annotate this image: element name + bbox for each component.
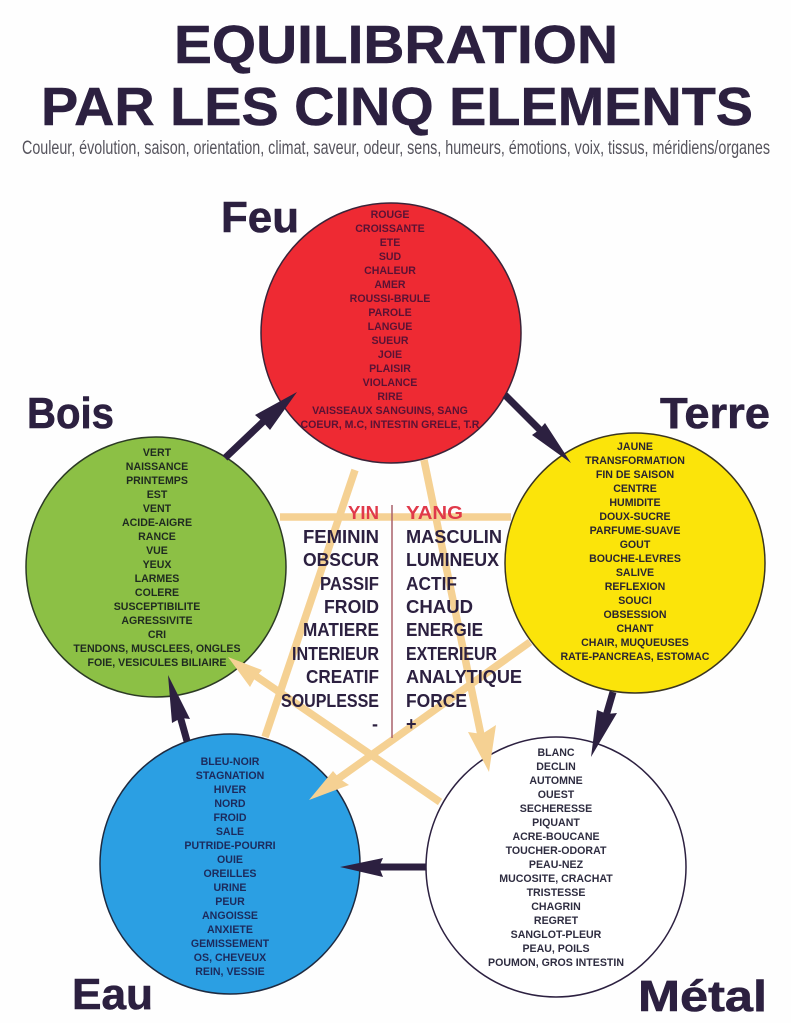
metal list: PEAU-NEZ xyxy=(529,859,584,871)
eau list: FROID xyxy=(214,812,247,824)
bois list: VUE xyxy=(146,545,168,557)
label: terre: Terre xyxy=(660,389,770,438)
yin column: MATIERE xyxy=(303,620,379,640)
terre list: RATE-PANCREAS, ESTOMAC xyxy=(561,651,710,663)
metal list: TOUCHER-ODORAT xyxy=(506,845,607,857)
feu list: RIRE xyxy=(377,391,403,403)
feu list: COEUR, M.C, INTESTIN GRELE, T.R xyxy=(301,419,480,431)
yin column xyxy=(281,503,379,734)
terre list: SOUCI xyxy=(618,595,652,607)
yin column: OBSCUR xyxy=(303,550,379,570)
yin column: PASSIF xyxy=(320,574,379,594)
feu list: LANGUE xyxy=(368,321,412,333)
title: PAR LES CINQ ELEMENTS xyxy=(41,77,753,137)
panel: bois xyxy=(26,437,286,697)
eau list: STAGNATION xyxy=(196,770,264,782)
eau list: BLEU-NOIR xyxy=(201,756,260,768)
eau list: PUTRIDE-POURRI xyxy=(184,840,276,852)
metal list: REGRET xyxy=(534,915,579,927)
terre list: BOUCHE-LEVRES xyxy=(589,553,681,565)
title: EQUILIBRATION xyxy=(174,15,618,75)
metal list: SECHERESSE xyxy=(520,803,592,815)
terre list: CENTRE xyxy=(613,483,657,495)
yin column: INTERIEUR xyxy=(292,644,379,664)
yang column: EXTERIEUR xyxy=(406,644,497,664)
panel: yin yang table xyxy=(281,503,522,738)
feu list: ETE xyxy=(380,237,400,249)
label: metal: Métal xyxy=(638,972,767,1021)
title xyxy=(41,15,753,137)
eau list: OREILLES xyxy=(204,868,256,880)
metal list: DECLIN xyxy=(536,761,576,773)
yang column: + xyxy=(406,714,417,734)
arrow: feu to terre xyxy=(505,395,571,463)
yang column: ENERGIE xyxy=(406,620,483,640)
terre list: SALIVE xyxy=(616,567,654,579)
metal list: CHAGRIN xyxy=(531,901,581,913)
feu list: SUD xyxy=(379,251,402,263)
yin column: CREATIF xyxy=(306,667,379,687)
bois list: VENT xyxy=(143,503,172,515)
yang column: ANALYTIQUE xyxy=(406,667,522,687)
bois list: SUSCEPTIBILITE xyxy=(114,601,200,613)
terre list: TRANSFORMATION xyxy=(585,455,685,467)
feu list: CROISSANTE xyxy=(355,223,425,235)
eau list: HIVER xyxy=(214,784,247,796)
label: bois: Bois xyxy=(27,389,114,438)
yin column: FEMININ xyxy=(303,527,379,547)
bois list: ACIDE-AIGRE xyxy=(122,517,192,529)
eau list: ANXIETE xyxy=(207,924,253,936)
panel: feu xyxy=(261,203,521,463)
eau list: GEMISSEMENT xyxy=(191,938,270,950)
bois list: PRINTEMPS xyxy=(126,475,188,487)
metal list: PIQUANT xyxy=(532,817,580,829)
bois list: EST xyxy=(147,489,168,501)
label: feu: Feu xyxy=(221,193,299,242)
yin column: FROID xyxy=(324,597,379,617)
feu list: PAROLE xyxy=(368,307,412,319)
bois list: AGRESSIVITE xyxy=(121,615,193,627)
feu list: PLAISIR xyxy=(369,363,411,375)
yang column: FORCE xyxy=(406,691,467,711)
terre list: JAUNE xyxy=(617,441,653,453)
metal list: SANGLOT-PLEUR xyxy=(511,929,602,941)
yang column: CHAUD xyxy=(406,597,473,617)
terre list: PARFUME-SUAVE xyxy=(590,525,680,537)
bois list: RANCE xyxy=(138,531,176,543)
arrow: terre to metal xyxy=(591,692,617,757)
terre list: REFLEXION xyxy=(605,581,665,593)
bois list: COLERE xyxy=(135,587,179,599)
panel: metal xyxy=(426,737,686,997)
terre list: CHANT xyxy=(616,623,654,635)
feu list: VAISSEAUX SANGUINS, SANG xyxy=(312,405,468,417)
yang column: YANG xyxy=(406,503,463,523)
panel: terre xyxy=(505,433,765,693)
metal list: ACRE-BOUCANE xyxy=(512,831,600,843)
metal list: BLANC xyxy=(537,747,575,759)
terre list: OBSESSION xyxy=(604,609,666,621)
yang column: ACTIF xyxy=(406,574,457,594)
label: eau: Eau xyxy=(72,970,153,1019)
panel: eau xyxy=(100,734,360,994)
bois list: FOIE, VESICULES BILIAIRE xyxy=(88,657,226,669)
terre list: HUMIDITE xyxy=(609,497,661,509)
arrow: eau to bois xyxy=(168,675,190,741)
bois list: TENDONS, MUSCLEES, ONGLES xyxy=(73,643,241,655)
metal list: POUMON, GROS INTESTIN xyxy=(488,957,624,969)
terre list: FIN DE SAISON xyxy=(596,469,674,481)
pentagram of tan arrows xyxy=(228,460,530,802)
yang column: MASCULIN xyxy=(406,527,502,547)
feu list: SUEUR xyxy=(371,335,409,347)
feu list: ROUSSI-BRULE xyxy=(350,293,430,305)
metal list: PEAU, POILS xyxy=(522,943,590,955)
terre list: GOUT xyxy=(620,539,651,551)
bois list: CRI xyxy=(148,629,166,641)
feu list: VIOLANCE xyxy=(363,377,417,389)
metal list: MUCOSITE, CRACHAT xyxy=(499,873,613,885)
yin column: YIN xyxy=(348,503,379,523)
bois list: VERT xyxy=(143,447,172,459)
eau list: REIN, VESSIE xyxy=(195,966,265,978)
bois list: LARMES xyxy=(135,573,179,585)
feu list: CHALEUR xyxy=(364,265,416,277)
metal list: OUEST xyxy=(538,789,575,801)
arrow: bois to feu xyxy=(225,392,297,458)
eau list: ANGOISSE xyxy=(202,910,258,922)
bois list: YEUX xyxy=(143,559,171,571)
eau list: OS, CHEVEUX xyxy=(194,952,266,964)
yang column: LUMINEUX xyxy=(406,550,499,570)
feu list: ROUGE xyxy=(371,209,409,221)
feu list: AMER xyxy=(374,279,406,291)
yin column: - xyxy=(372,714,378,734)
eau list: PEUR xyxy=(215,896,245,908)
metal list: TRISTESSE xyxy=(527,887,585,899)
terre list: DOUX-SUCRE xyxy=(599,511,671,523)
eau list: URINE xyxy=(214,882,246,894)
arrow: metal to eau xyxy=(340,858,426,877)
metal list: AUTOMNE xyxy=(529,775,583,787)
yang column xyxy=(406,503,522,734)
yin column: SOUPLESSE xyxy=(281,691,379,711)
terre list: CHAIR, MUQUEUSES xyxy=(581,637,689,649)
eau list: SALE xyxy=(216,826,244,838)
eau list: OUIE xyxy=(217,854,243,866)
bois list: NAISSANCE xyxy=(126,461,188,473)
feu list: JOIE xyxy=(378,349,402,361)
eau list: NORD xyxy=(214,798,246,810)
